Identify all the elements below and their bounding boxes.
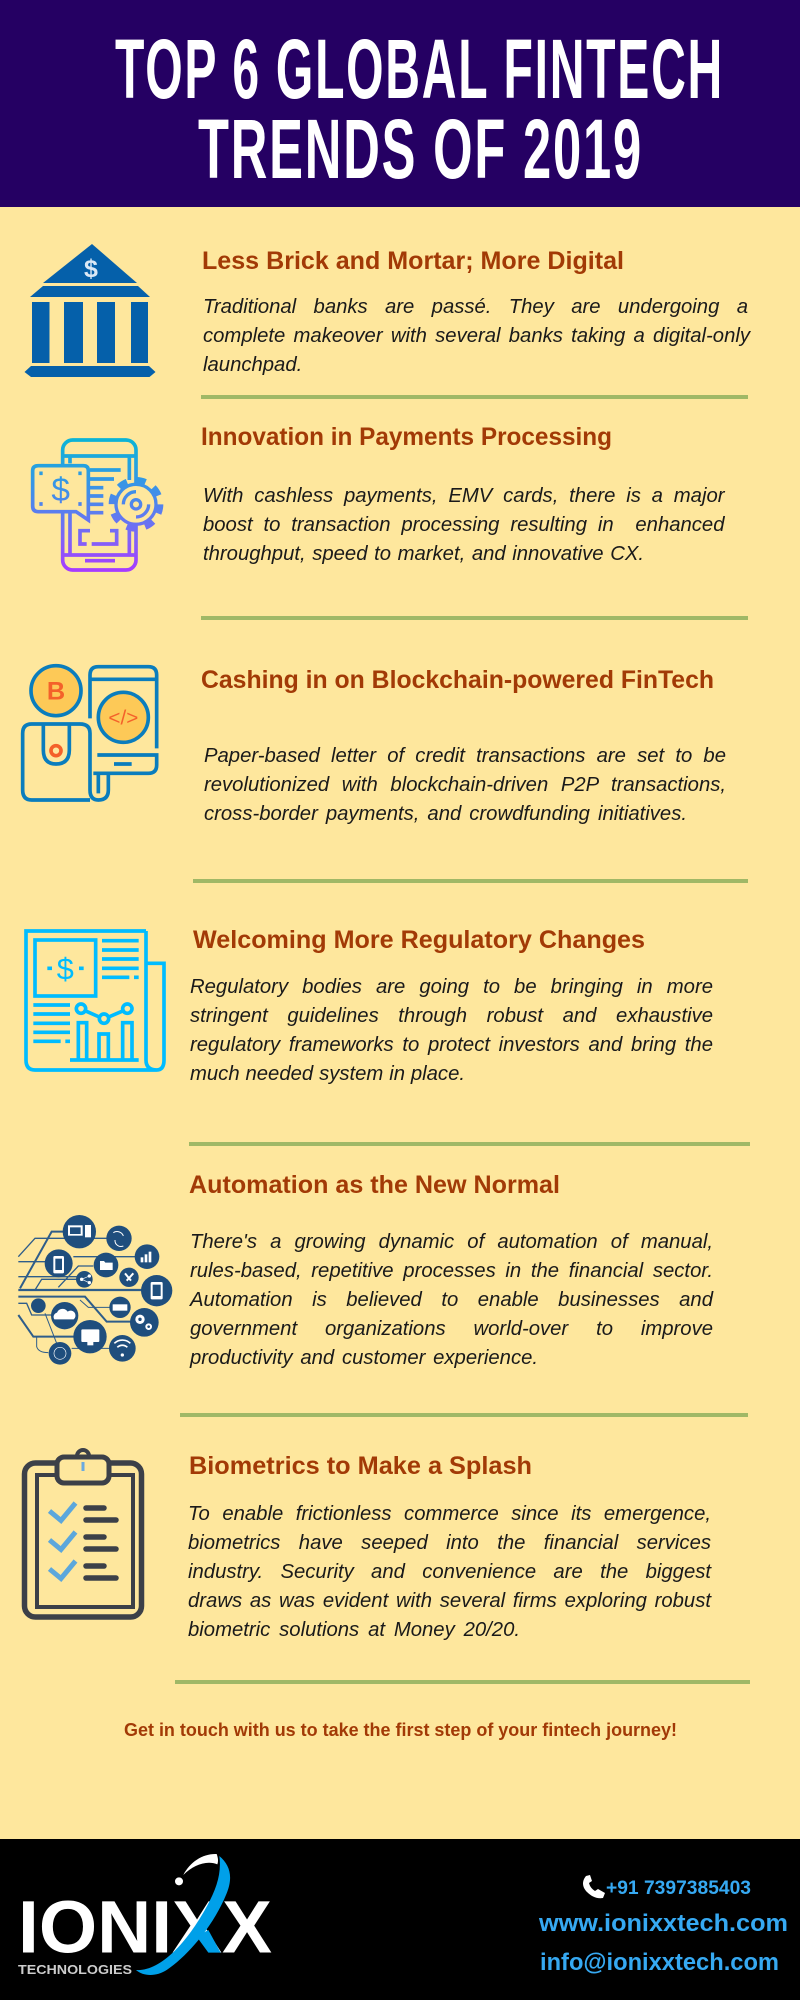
header banner <box>0 0 800 207</box>
body text: To enable frictionless commerce since its emergence, <box>188 1502 711 1524</box>
body text: boost to transaction processing resulting in enhanced <box>203 514 724 536</box>
icon: bitcoin wallet and phone <box>20 664 158 802</box>
heading: Biometrics to Make a Splash <box>189 1452 532 1480</box>
icon: bitcoin wallet and phone: B <box>47 677 65 705</box>
body text: biometrics have seeped into the financial services <box>188 1532 711 1554</box>
body text: draws as was evident with several firms exploring robust <box>188 1590 711 1612</box>
body text: Traditional banks are passé. They are undergoing a <box>203 296 748 318</box>
icon: clipboard checklist <box>22 1448 144 1620</box>
contact details: +91 7397385403 <box>606 1877 751 1899</box>
body text <box>204 745 726 825</box>
body text: biometric solutions at Money 20/20. <box>188 1619 520 1641</box>
body text: There's a growing dynamic of automation of manual, <box>190 1231 713 1253</box>
body text: much needed system in place. <box>190 1063 465 1085</box>
footer <box>0 1839 800 2000</box>
body text: cross-border payments, and crowdfunding initiatives. <box>204 803 687 825</box>
icon: phone <box>583 1875 605 1898</box>
panel: regulatory changes <box>24 926 713 1085</box>
contact details <box>538 1875 788 1976</box>
body text <box>190 976 713 1085</box>
body text <box>188 1502 712 1641</box>
heading: Welcoming More Regulatory Changes <box>193 926 645 954</box>
contact details: www.ionixxtech.com <box>538 1910 788 1937</box>
panel: biometrics <box>22 1448 712 1641</box>
panel: less brick and mortar <box>24 244 751 377</box>
body text: throughput, speed to market, and innovative CX. <box>203 543 644 565</box>
body text: Paper-based letter of credit transactions are set to be <box>204 745 726 767</box>
logo: ionixx technologies: IONIXX <box>18 1886 272 1969</box>
title <box>115 22 724 196</box>
body text: launchpad. <box>203 354 302 376</box>
panel: innovation in payments processing <box>30 423 726 572</box>
icon: bank: $ <box>84 255 98 283</box>
icon: financial newspaper <box>24 929 166 1072</box>
body text: stringent guidelines through robust and exhaustive <box>190 1005 713 1027</box>
icon: phone with payment and gear <box>30 438 164 572</box>
body text: revolutionized with blockchain-driven P2P transactions, <box>204 774 726 796</box>
call to action: Get in touch with us to take the first step of your fintech journey! <box>124 1720 677 1740</box>
body text: complete makeover with several banks taking a digital-only <box>203 325 750 347</box>
logo: ionixx technologies: TECHNOLOGIES <box>18 1962 132 1977</box>
icon: technology network <box>18 1215 172 1365</box>
body text: productivity and customer experience. <box>190 1347 538 1369</box>
body text: regulatory frameworks to protect investors and bring the <box>190 1034 713 1056</box>
heading: Innovation in Payments Processing <box>201 423 612 451</box>
icon: bank <box>24 244 156 377</box>
contact details: info@ionixxtech.com <box>540 1949 779 1976</box>
body text <box>189 1231 714 1369</box>
icon: phone with payment and gear: $ <box>51 472 70 509</box>
body text <box>203 485 726 565</box>
body text: Regulatory bodies are going to be bringing in more <box>190 976 713 998</box>
body text: rules-based, repetitive processes in the financial sector. <box>190 1260 713 1282</box>
heading: Automation as the New Normal <box>189 1171 560 1199</box>
body text: Automation is believed to enable businesses and <box>190 1289 713 1311</box>
body text: government organizations world-over to improve <box>190 1318 713 1340</box>
body text: industry. Security and convenience are the biggest <box>188 1560 711 1582</box>
panel: automation <box>18 1171 714 1369</box>
heading: Less Brick and Mortar; More Digital <box>202 247 624 275</box>
icon: bitcoin wallet and phone: </> <box>108 707 138 730</box>
logo: ionixx technologies <box>18 1854 272 1977</box>
body text: With cashless payments, EMV cards, there is a major <box>203 485 724 507</box>
icon: financial newspaper: $ <box>57 952 74 986</box>
panel: blockchain-powered fintech <box>20 664 726 825</box>
body text <box>203 296 751 376</box>
heading: Cashing in on Blockchain-powered FinTech <box>201 666 714 694</box>
